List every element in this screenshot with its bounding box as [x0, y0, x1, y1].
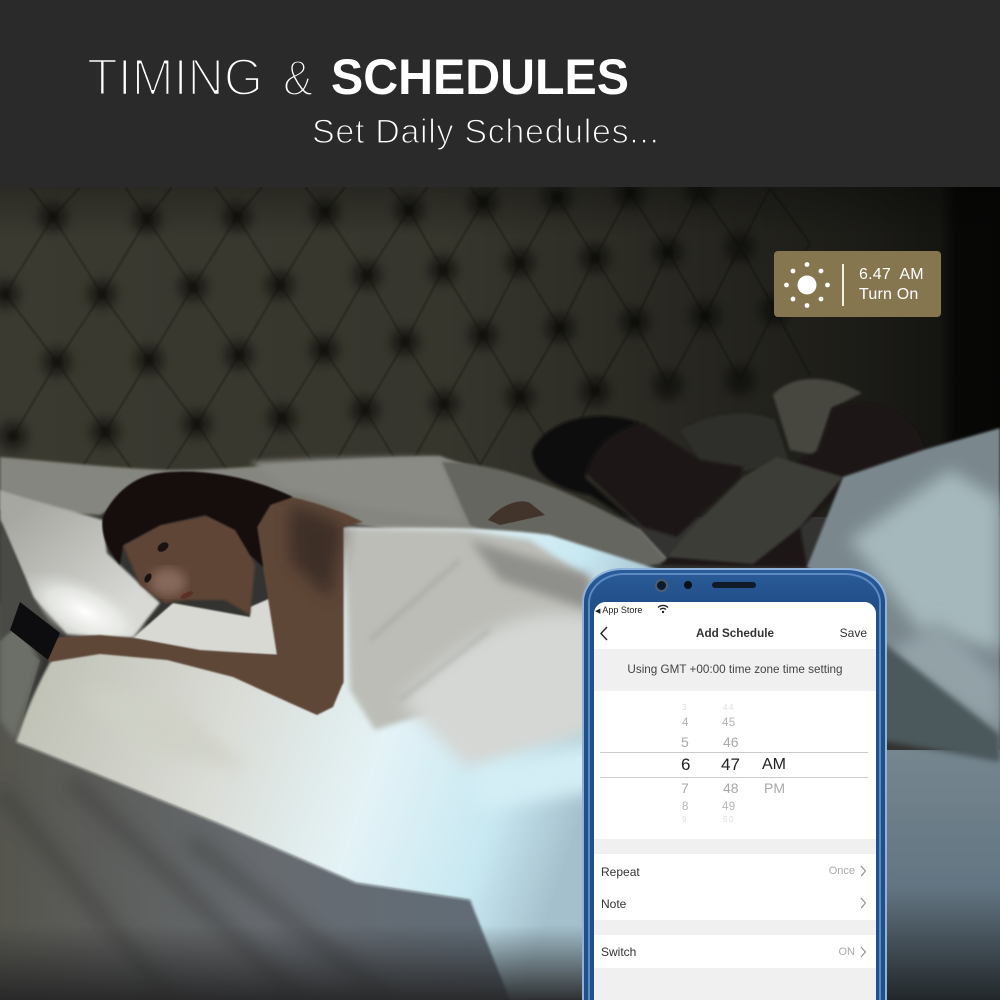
- badge text: Turn On: [859, 286, 918, 303]
- note row: Note: [601, 897, 626, 911]
- save button: Save: [840, 626, 867, 640]
- time zone note: Using GMT +00:00 time zone time setting: [627, 663, 843, 676]
- badge text: 6.47 AM: [859, 266, 924, 283]
- header band: [0, 0, 1000, 187]
- duvet right: [807, 428, 1000, 1000]
- badge text: [859, 266, 924, 303]
- time picker: 45: [722, 717, 736, 729]
- status and nav bar: [594, 602, 876, 649]
- note chevron: [860, 898, 866, 908]
- phone: [582, 568, 887, 1000]
- title: timing: TIMING: [87, 49, 263, 107]
- phone screen: [594, 602, 876, 1000]
- sensor: [684, 581, 692, 589]
- title: schedules: SCHEDULES: [331, 49, 629, 105]
- icon: sun: [784, 262, 830, 308]
- repeat value: Once: [829, 865, 855, 877]
- time picker: PM: [764, 780, 785, 796]
- camera: [655, 579, 668, 592]
- bed sheet: [0, 600, 530, 1000]
- picker rows: [600, 752, 868, 778]
- title and subtitle: [87, 49, 659, 151]
- time picker: 44: [723, 703, 735, 712]
- phone top bezel details: [655, 579, 756, 592]
- bottom shade: [0, 925, 880, 1000]
- screen title: Add Schedule: [696, 627, 774, 640]
- pillows: [0, 456, 668, 671]
- speaker: [712, 582, 756, 588]
- time picker: 9: [682, 815, 686, 824]
- switch row: [594, 935, 876, 968]
- time picker: AM: [762, 756, 786, 773]
- settings group: repeat and note: [594, 854, 876, 920]
- divider: [842, 264, 844, 306]
- subtitle: Set Daily Schedules...: [312, 113, 659, 151]
- face details: [143, 540, 194, 600]
- time picker: [594, 691, 876, 839]
- woman with phone: [10, 472, 363, 715]
- time picker: 6: [681, 755, 690, 774]
- repeat chevron: [860, 866, 866, 876]
- time picker: 3: [682, 703, 686, 712]
- badge: schedule time: [774, 251, 941, 317]
- time picker: 47: [721, 755, 740, 774]
- time picker: 8: [682, 801, 688, 813]
- switch label: Switch: [601, 945, 636, 959]
- man sleeping: [488, 379, 924, 567]
- headboard: [0, 175, 1000, 517]
- time picker: 5: [681, 734, 689, 750]
- time picker: 46: [723, 734, 739, 750]
- time picker: 49: [722, 801, 736, 813]
- status text: ◀ App Store: [595, 605, 642, 615]
- switch value: ON: [838, 946, 855, 958]
- switch chevron: [860, 946, 866, 958]
- title: ampersand: &: [283, 50, 313, 106]
- time picker: 48: [723, 780, 739, 796]
- phone frame stripes: [588, 573, 881, 1000]
- white duvet: [16, 527, 660, 1000]
- time picker: 4: [682, 717, 688, 729]
- icon: wifi: [658, 604, 668, 614]
- repeat row: Repeat: [601, 865, 640, 879]
- back arrow: [600, 626, 608, 640]
- time picker: 7: [681, 780, 689, 796]
- time picker: 50: [723, 815, 735, 824]
